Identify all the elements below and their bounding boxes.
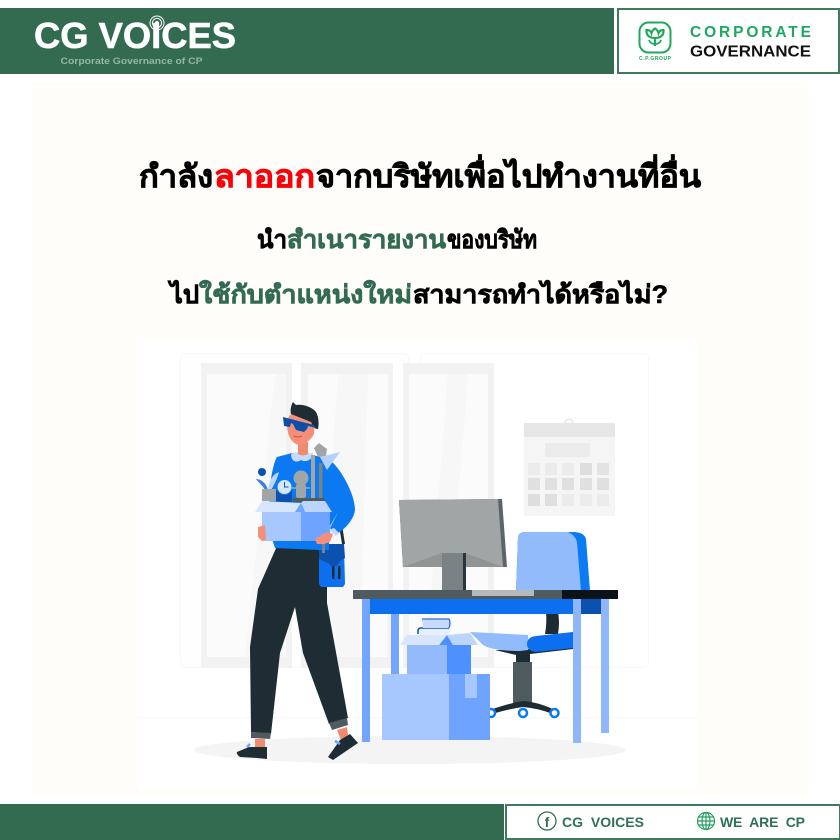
icon: facebook: f [545, 814, 550, 830]
icon: facebook [538, 812, 556, 830]
title: จากบริษัทเพื่อไปทำงานที่อื่น [316, 154, 701, 194]
floor line [138, 716, 697, 718]
sweater [269, 453, 355, 550]
neck [298, 442, 308, 456]
desk [353, 590, 618, 743]
title: ลาออก [214, 159, 315, 194]
cuffs [251, 718, 348, 739]
subtitle line 2 [167, 279, 668, 309]
subtitle line 1: ของบริษัท [447, 226, 537, 254]
window panels [180, 354, 648, 668]
corporate governance badge [618, 9, 839, 73]
title [139, 154, 701, 194]
sunglasses [283, 417, 316, 432]
wall calendar [524, 419, 615, 516]
cream background panel [32, 82, 808, 796]
shoulder bag [333, 486, 345, 544]
office chair [470, 532, 590, 717]
trousers [250, 546, 348, 734]
subtitle line 1 [257, 226, 537, 254]
subtitle line 2: สามารถทำได้หรือไม่? [413, 279, 668, 309]
lamp [311, 455, 315, 499]
header banner [0, 8, 614, 74]
floor shadow [194, 736, 626, 764]
clock [276, 490, 292, 502]
subtitle line 2: ใช้กับตำแหน่งใหม่ [199, 279, 412, 309]
footer banner [0, 804, 504, 840]
header tagline: Corporate Governance of CP [60, 56, 203, 67]
stacked boxes [382, 619, 490, 740]
subtitle line 1: นำ [257, 226, 287, 254]
hands [258, 525, 266, 541]
badge text: corporate: CORPORATE [690, 24, 811, 41]
person walking with box [237, 402, 358, 760]
icon: CP group logo [639, 22, 672, 62]
ankles [255, 727, 348, 748]
head [287, 412, 315, 445]
CG Voices wordmark: CG VOICES [34, 15, 236, 56]
shoes [237, 747, 267, 759]
signal icon on wordmark [150, 16, 164, 30]
plant [256, 479, 268, 490]
subtitle line 1: สำเนารายงาน [287, 226, 446, 254]
monitor [399, 499, 507, 591]
hair [291, 402, 319, 429]
illustration: employee leaving office [138, 340, 697, 790]
icon: CP group logo: C.P.GROUP [639, 56, 672, 62]
robot figure [294, 470, 308, 486]
collar [291, 452, 313, 462]
subtitle line 2: ไป [167, 279, 199, 309]
badge text: governance: GOVERNANCE [690, 44, 811, 60]
smile [294, 436, 302, 437]
icon: globe [698, 812, 714, 830]
footer label: CG Voices: CG VOICES [562, 814, 644, 830]
footer label: We Are CP: WE ARE CP [720, 814, 805, 830]
title: กำลัง [139, 159, 213, 194]
cardboard box [262, 512, 301, 541]
footer links box [506, 805, 840, 839]
